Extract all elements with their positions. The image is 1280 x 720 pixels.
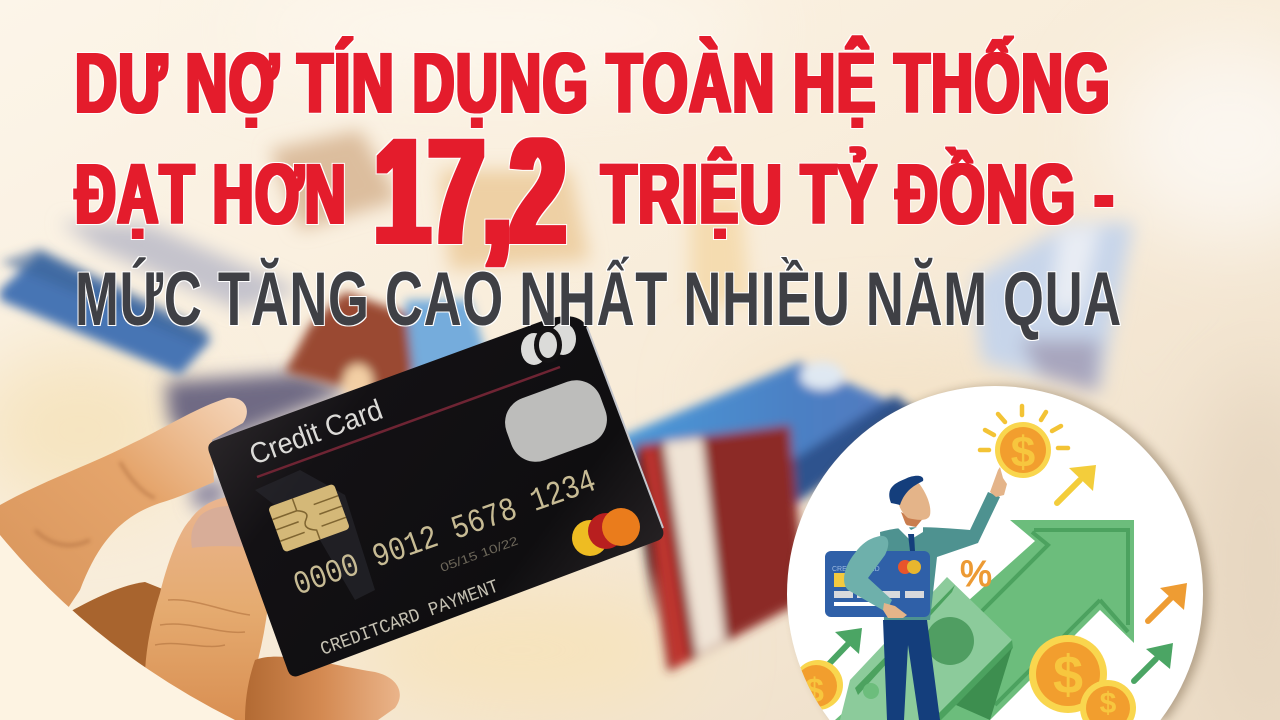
person head — [897, 481, 930, 520]
blurred lilac card top — [60, 222, 300, 310]
icon: sun coin: $ — [1011, 428, 1035, 477]
card edge highlight — [587, 327, 663, 528]
blurred light blue strip — [405, 300, 485, 390]
lower finger — [245, 657, 400, 720]
person raised hand — [990, 467, 1007, 497]
card small date: 05/15 10/22 — [438, 533, 520, 575]
blurred lilac strip behind hand — [165, 372, 350, 445]
icon: large coin: $ — [1053, 645, 1083, 705]
blurred brown card centre — [285, 292, 425, 402]
thumb nail — [191, 506, 266, 548]
person lower hand — [883, 603, 907, 618]
circle illustration — [787, 386, 1209, 720]
icon: person legs — [883, 620, 940, 720]
person hair — [889, 476, 923, 505]
person arm — [844, 536, 892, 612]
title — [75, 36, 1122, 342]
blurred blue card right of main — [613, 362, 919, 514]
icon: person with credit card — [825, 467, 1007, 620]
card label: Credit Card — [245, 394, 387, 472]
finger crease marks — [35, 462, 155, 545]
blurred blue card left — [0, 253, 212, 375]
blurred red card — [635, 425, 805, 672]
card logo rings — [521, 323, 576, 365]
hologram map — [498, 373, 614, 469]
card number: 0000 9012 5678 1234 — [289, 463, 601, 604]
card network circles — [572, 508, 640, 556]
blurred pale blue card top right — [973, 223, 1134, 392]
hand: thumb — [145, 497, 271, 720]
chip — [268, 483, 350, 553]
person collar — [897, 523, 923, 540]
blurred tan behind headline — [270, 130, 400, 230]
big number: 17,2 — [375, 107, 565, 275]
hand: gap shadow — [55, 582, 165, 690]
icon: banknote — [840, 577, 1013, 720]
cream curved corner — [0, 535, 235, 720]
icon: small green arrow left — [828, 628, 862, 665]
credit card — [208, 316, 663, 676]
icon: coin bottom left — [800, 660, 843, 710]
icon: person with credit card: CREDIT CARD — [832, 566, 880, 573]
icon: percent sign: % — [960, 553, 992, 594]
world map shadow — [255, 470, 375, 600]
icon: sun coin — [980, 406, 1068, 478]
icon: yellow arrow — [1057, 465, 1096, 503]
icon: small coin — [1080, 680, 1136, 720]
hand: index finger — [0, 398, 247, 620]
card payment label: CREDITCARD PAYMENT — [318, 576, 502, 661]
icon: big green arrow — [835, 520, 1134, 720]
card top stripe — [257, 367, 560, 477]
person neck — [901, 512, 925, 527]
icon: green arrow right — [1134, 643, 1173, 681]
icon: coin bottom left: $ — [805, 672, 824, 710]
icon: large coin — [1029, 635, 1107, 713]
credit card held — [825, 551, 930, 617]
icon: small coin: $ — [1100, 687, 1117, 720]
icon: orange arrow — [1148, 583, 1187, 621]
person torso — [880, 492, 1000, 620]
title line 2 left: ĐẠT HƠN — [75, 147, 347, 241]
